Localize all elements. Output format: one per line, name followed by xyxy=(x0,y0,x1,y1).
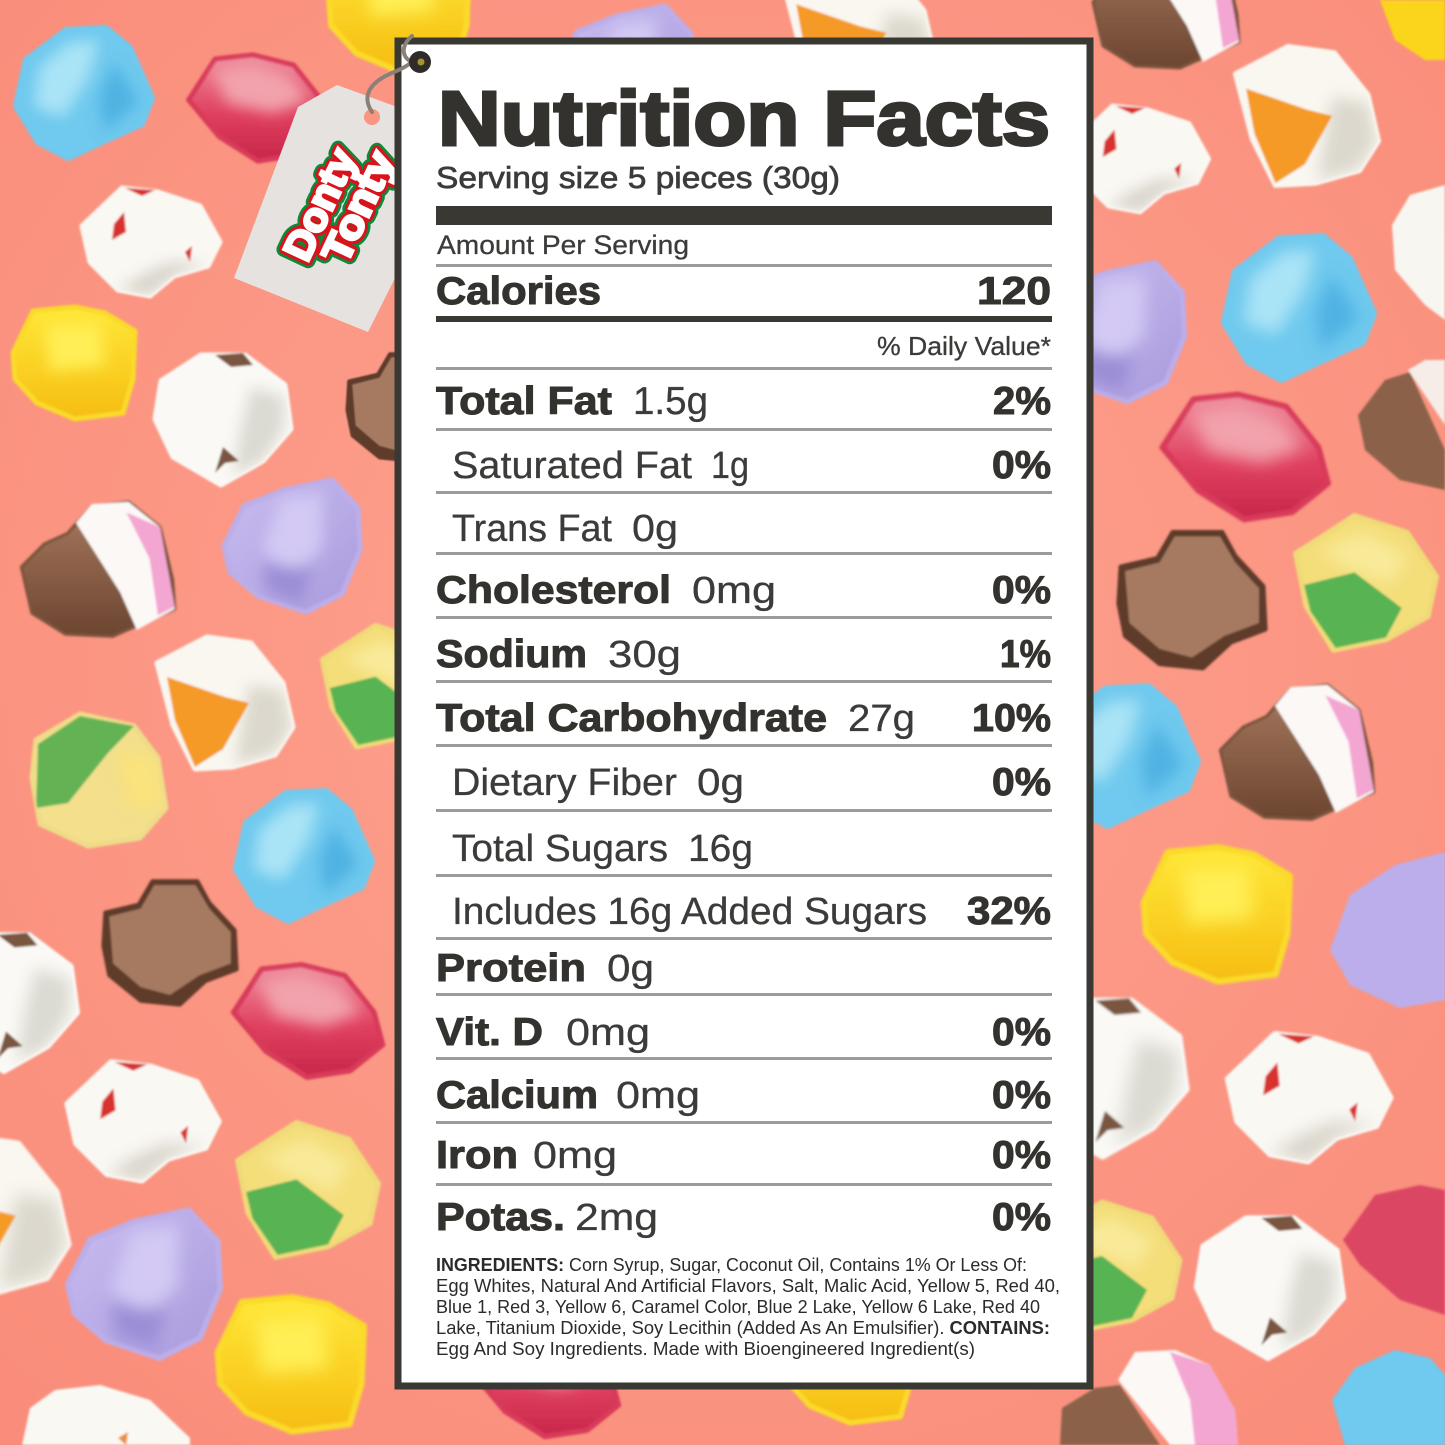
row: total fat: Total Fat xyxy=(436,380,612,423)
row: trans fat: 0g xyxy=(632,508,678,550)
row: protein xyxy=(436,947,654,990)
calories row: Calories xyxy=(436,270,601,313)
row: total fat xyxy=(436,380,1051,423)
row: total sugars: Total Sugars xyxy=(452,828,668,870)
tag logo: Donty Tonty: Tonty xyxy=(314,144,404,270)
candy: yellow right xyxy=(1144,847,1290,982)
ingredients text block: Lake, Titanium Dioxide, Soy Lecithin (Added As An Emulsifier). CONTAINS: xyxy=(436,1318,1050,1338)
panel: nutrition facts label xyxy=(398,41,1090,1386)
candy: chocolate panel edge xyxy=(347,354,463,461)
ingredients text block: Blue 1, Red 3, Yellow 6, Caramel Color, Blue 2 Lake, Yellow 6 Lake, Red 40 xyxy=(436,1297,1040,1317)
candy: lilac right panel edge xyxy=(1042,263,1184,401)
candy: white top left xyxy=(82,188,220,296)
ingredients text block xyxy=(436,1255,1060,1359)
candy: red top left xyxy=(189,55,329,161)
row: dietary fiber xyxy=(452,761,1051,804)
row: cholesterol: 0% xyxy=(992,569,1051,612)
row: calcium: 0% xyxy=(992,1074,1051,1117)
row: total carbohydrate: 10% xyxy=(972,697,1051,740)
row: sodium: Sodium xyxy=(436,633,587,676)
row: saturated fat: Saturated Fat xyxy=(452,445,692,487)
candy: lilac left xyxy=(224,480,360,612)
row: iron: 0mg xyxy=(533,1135,617,1177)
row: saturated fat xyxy=(452,444,1051,487)
row: iron: Iron xyxy=(436,1134,518,1177)
candy: orange far left xyxy=(0,1136,69,1295)
candy: orange top right xyxy=(1236,47,1378,185)
candy: blue top left xyxy=(16,28,152,158)
row: cholesterol xyxy=(436,569,1051,612)
tag logo: Donty Tonty: Donty xyxy=(276,141,366,267)
ingredients text block: Egg Whites, Natural And Artificial Flavors, Salt, Malic Acid, Yellow 5, Red 40, xyxy=(436,1276,1060,1296)
candy: red bottom xyxy=(474,1327,618,1437)
row: total sugars: 16g xyxy=(688,828,753,870)
candy: blue bottom right xyxy=(1332,1350,1445,1445)
amount per serving: Amount Per Serving xyxy=(437,230,689,260)
candy: yellow bottom xyxy=(785,1305,913,1423)
candy: red far right xyxy=(1343,1185,1445,1315)
thick divider xyxy=(436,206,1052,225)
candy: blue right xyxy=(1224,237,1374,380)
candy: lilac top xyxy=(557,6,693,138)
candy: white chocolate left xyxy=(155,353,291,485)
candy: lilac lower left xyxy=(68,1210,220,1358)
row: calcium: 0mg xyxy=(616,1075,700,1117)
candy: yellow left xyxy=(13,307,135,419)
candy: lilac far right xyxy=(1330,852,1445,1008)
candy: white chocolate panel edge xyxy=(1023,998,1187,1157)
row: added sugars: 32% xyxy=(967,890,1051,933)
row: saturated fat: 0% xyxy=(992,444,1051,487)
candy: white lower left xyxy=(67,1062,219,1181)
candy: chocolate white right corner xyxy=(1358,360,1445,490)
candy: blue right panel edge xyxy=(1052,687,1198,826)
row: protein: Protein xyxy=(436,947,586,990)
row: total carbohydrate: 27g xyxy=(848,698,915,740)
candy: chocolate pink bottom xyxy=(1060,1350,1238,1445)
row: sodium: 1% xyxy=(1000,633,1051,676)
tag logo: Donty Tonty: Tonty xyxy=(314,144,404,270)
candy: yellow top xyxy=(329,0,469,72)
calories row: 120 xyxy=(977,270,1051,313)
hang tag xyxy=(234,85,404,332)
row: total carbohydrate: Total Carbohydrate xyxy=(436,697,827,740)
string and grommet xyxy=(367,36,431,112)
candy: green yellow panel edge xyxy=(322,625,450,747)
row: sodium xyxy=(436,633,1051,676)
candy: white chocolate far left xyxy=(0,933,77,1071)
candy: white bottom left xyxy=(22,1385,190,1445)
row: vitamin d: 0mg xyxy=(566,1012,650,1054)
candy: yellow lower left xyxy=(218,1297,364,1432)
candy: white right corner xyxy=(1392,185,1445,320)
candy: orange top xyxy=(785,0,935,105)
row: iron xyxy=(436,1134,1051,1177)
row: potassium: 2mg xyxy=(575,1197,658,1239)
calories row xyxy=(436,270,1051,313)
row: potassium: Potas. xyxy=(436,1196,565,1239)
row: dietary fiber: 0g xyxy=(697,762,744,804)
candy: green yellow lower left xyxy=(238,1123,378,1257)
row: sodium: 30g xyxy=(608,634,681,676)
daily value heading: % Daily Value* xyxy=(877,331,1051,361)
tag logo: Donty Tonty: Donty xyxy=(276,141,366,267)
candy: blue mid left xyxy=(236,791,372,921)
row: total carbohydrate xyxy=(436,697,1051,740)
row: vitamin d: 0% xyxy=(992,1011,1051,1054)
row: vitamin d: Vit. D xyxy=(436,1011,543,1054)
tag logo: Donty Tonty: Donty xyxy=(276,141,366,267)
candy: orange left xyxy=(157,637,293,769)
row: vitamin d xyxy=(436,1011,1051,1054)
row: total fat: 1.5g xyxy=(633,380,708,423)
candy: yellow top corner xyxy=(1380,0,1445,60)
candy: chocolate left xyxy=(103,881,237,1005)
tag logo: Donty Tonty xyxy=(276,128,404,283)
candy: white right panel edge xyxy=(1073,106,1209,212)
candy: green yellow panel edge lower xyxy=(1046,1202,1180,1330)
candy: chocolate right xyxy=(1119,532,1265,668)
row: cholesterol: Cholesterol xyxy=(436,569,671,612)
row: potassium xyxy=(436,1196,1051,1239)
row: dietary fiber: Dietary Fiber xyxy=(452,762,677,804)
candy: chocolate pink right xyxy=(1220,685,1374,819)
candy: white right lower xyxy=(1228,1034,1391,1161)
ingredients text block: INGREDIENTS: Corn Syrup, Sugar, Coconut Oil, Contains 1% Or Less Of: xyxy=(436,1255,1027,1275)
tag logo: Donty Tonty: Tonty xyxy=(314,144,404,270)
candy: red lower left xyxy=(234,965,383,1077)
serving size: Serving size 5 pieces (30g) xyxy=(436,160,840,195)
title: Nutrition Facts xyxy=(438,76,1050,162)
row: cholesterol: 0mg xyxy=(692,570,776,612)
row: saturated fat: 1g xyxy=(711,445,749,487)
candy: green yellow left xyxy=(32,714,166,846)
row: iron: 0% xyxy=(992,1134,1051,1177)
row: trans fat: Trans Fat xyxy=(452,508,612,550)
row: total fat: 2% xyxy=(993,380,1051,423)
ingredients text block: Egg And Soy Ingredients. Made with Bioengineered Ingredient(s) xyxy=(436,1339,975,1359)
candy: white chocolate right lower xyxy=(1197,1216,1343,1358)
row: calcium: Calcium xyxy=(436,1074,598,1117)
candy: chocolate pink left xyxy=(21,502,175,636)
candy: chocolate pink top right xyxy=(1093,0,1239,68)
row: calcium xyxy=(436,1074,1051,1117)
row: protein: 0g xyxy=(607,948,654,990)
candy: red right xyxy=(1162,395,1328,519)
row: dietary fiber: 0% xyxy=(992,761,1051,804)
row: added sugars: Includes 16g Added Sugars xyxy=(452,891,927,933)
candy: green yellow right xyxy=(1296,516,1436,650)
row: potassium: 0% xyxy=(992,1196,1051,1239)
